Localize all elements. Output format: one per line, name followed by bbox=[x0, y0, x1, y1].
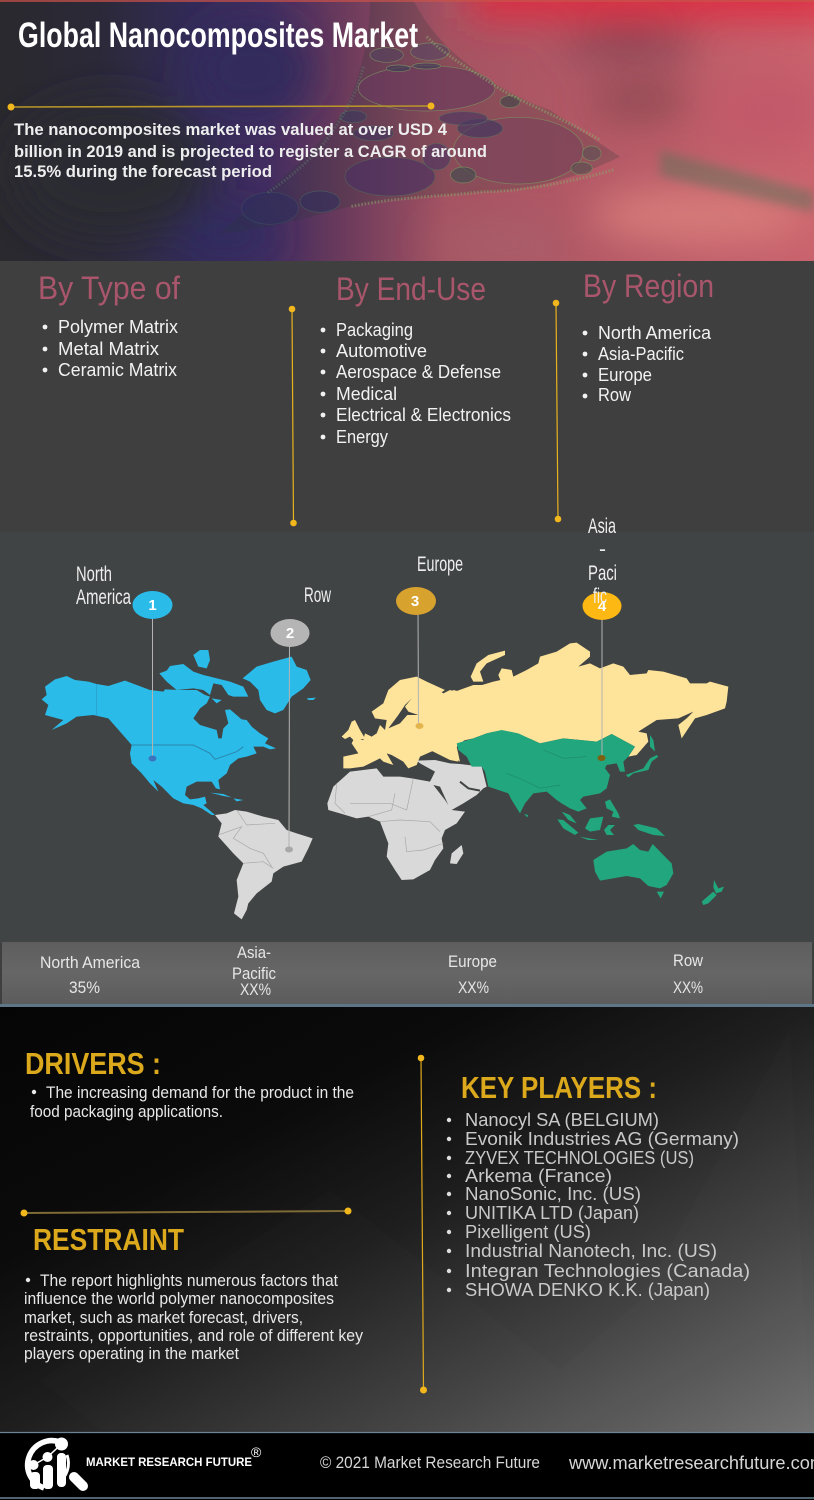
list: regions: Europe bbox=[598, 364, 652, 385]
panel: header banner bbox=[0, 0, 814, 261]
divider: type and end-use bbox=[289, 306, 297, 526]
brand name: MARKET RESEARCH FUTURE bbox=[86, 1457, 252, 1469]
drivers text bbox=[30, 1084, 354, 1121]
list: key players: UNITIKA LTD (Japan) bbox=[465, 1203, 639, 1223]
map label: asia-pacific bbox=[588, 515, 617, 608]
list: end-uses: Aerospace & Defense bbox=[336, 361, 501, 382]
pin 2: row: 2 bbox=[286, 625, 294, 642]
panel: footer bbox=[0, 1432, 814, 1500]
list: key players: NanoSonic, Inc. (US) bbox=[465, 1184, 641, 1204]
list: end-uses: Packaging bbox=[336, 319, 413, 340]
restraint text: players operating in the market bbox=[24, 1345, 239, 1363]
list: regions bbox=[583, 322, 712, 405]
list: key players: Evonik Industries AG (Germany) bbox=[465, 1129, 739, 1149]
panel: share strip bbox=[0, 942, 814, 1007]
copyright: © 2021 Market Research Future bbox=[320, 1454, 540, 1472]
heading: drivers: DRIVERS : bbox=[25, 1046, 161, 1081]
list: key players: Pixelligent (US) bbox=[465, 1222, 591, 1242]
panel: drivers, restraint and key players bbox=[0, 1007, 814, 1432]
list: types: Metal Matrix bbox=[58, 338, 160, 359]
share: asia-pacific: Pacific bbox=[232, 965, 276, 983]
pin 4: asia-pacific bbox=[582, 592, 622, 761]
list: end-uses: Medical bbox=[336, 383, 397, 404]
list: types: Polymer Matrix bbox=[58, 316, 179, 337]
drivers text: The increasing demand for the product in the bbox=[46, 1084, 354, 1102]
pin 2: row bbox=[270, 619, 310, 852]
heading: key players: KEY PLAYERS : bbox=[461, 1070, 657, 1105]
gold divider: drivers and restraint bbox=[20, 1208, 352, 1216]
pin 1: north america: 1 bbox=[148, 597, 157, 614]
pin 3: europe bbox=[396, 587, 436, 729]
heading: by type: By Type of bbox=[38, 270, 180, 306]
share: europe: XX% bbox=[458, 979, 489, 997]
map: asia-pacific bbox=[457, 730, 724, 905]
list: regions: North America bbox=[598, 322, 712, 343]
share: row: XX% bbox=[673, 979, 703, 997]
list: regions: Row bbox=[598, 384, 632, 405]
divider: end-use and region bbox=[553, 300, 561, 522]
list: key players bbox=[447, 1110, 750, 1300]
heading: by end-use: By End-Use bbox=[336, 271, 486, 307]
panel: by end-use bbox=[321, 271, 511, 447]
list: end-uses bbox=[321, 319, 511, 447]
heading: restraint: RESTRAINT bbox=[33, 1222, 184, 1257]
list: key players: Industrial Nanotech, Inc. (US) bbox=[465, 1241, 717, 1261]
panel: by type bbox=[38, 270, 180, 380]
map: north america bbox=[42, 650, 316, 815]
map label: asia-pacific: Paci bbox=[588, 562, 617, 585]
panel: by region bbox=[583, 268, 714, 405]
map label: north america: America bbox=[76, 586, 131, 609]
heading: by region: By Region bbox=[583, 268, 714, 304]
fractal tail bbox=[660, 150, 814, 212]
restraint text: restraints, opportunities, and role of different key bbox=[24, 1327, 364, 1345]
map label: asia-pacific: fic bbox=[593, 585, 607, 608]
map label: asia-pacific: Asia bbox=[588, 515, 616, 538]
intro text: 15.5% during the forecast period bbox=[14, 162, 272, 181]
list: regions: Asia-Pacific bbox=[598, 343, 684, 364]
pin 1: north america bbox=[132, 591, 172, 762]
title: Global Nanocomposites Market bbox=[18, 16, 418, 55]
share: asia-pacific: Asia- bbox=[237, 944, 271, 962]
drivers text: food packaging applications. bbox=[30, 1103, 223, 1121]
map label: row: Row bbox=[304, 584, 332, 607]
intro text: billion in 2019 and is projected to register a CAGR of around bbox=[14, 142, 487, 161]
restraint text: influence the world polymer nanocomposites bbox=[24, 1290, 334, 1308]
list: key players: SHOWA DENKO K.K. (Japan) bbox=[465, 1280, 710, 1300]
list: key players: ZYVEX TECHNOLOGIES (US) bbox=[465, 1148, 694, 1168]
share: europe bbox=[448, 953, 497, 997]
panel: world map section bbox=[0, 532, 814, 943]
divider: left and right columns bbox=[418, 1055, 427, 1394]
icon: logo magnifier bbox=[28, 1438, 83, 1489]
map label: asia-pacific: - bbox=[599, 538, 606, 561]
restraint text: market, such as market forecast, drivers, bbox=[24, 1309, 303, 1327]
restraint text: The report highlights numerous factors that bbox=[40, 1272, 338, 1290]
pin 3: europe: 3 bbox=[411, 593, 419, 610]
share: asia-pacific bbox=[232, 944, 276, 999]
list: end-uses: Electrical & Electronics bbox=[336, 404, 511, 425]
intro text bbox=[14, 120, 487, 181]
map label: north america bbox=[76, 563, 131, 609]
drivers block bbox=[25, 1046, 354, 1121]
list: end-uses: Energy bbox=[336, 426, 389, 447]
top accent bbox=[0, 0, 814, 2]
fractal web bbox=[220, 0, 620, 233]
restraint block bbox=[24, 1222, 364, 1363]
share: north america: North America bbox=[40, 954, 141, 972]
share: row: Row bbox=[673, 952, 703, 970]
panel: segmentation bbox=[0, 261, 814, 532]
intro text: The nanocomposites market was valued at over USD 4 bbox=[14, 120, 448, 139]
list: end-uses: Automotive bbox=[336, 340, 427, 361]
key players block bbox=[447, 1070, 750, 1300]
map: europe and russia bbox=[342, 643, 728, 768]
share: europe: Europe bbox=[448, 953, 497, 971]
share: north america: 35% bbox=[69, 979, 100, 997]
list: key players: Nanocyl SA (BELGIUM) bbox=[465, 1110, 659, 1130]
list: types bbox=[43, 316, 179, 380]
list: key players: Integran Technologies (Canada) bbox=[465, 1261, 750, 1281]
list: types: Ceramic Matrix bbox=[58, 359, 178, 380]
registered mark: ® bbox=[251, 1444, 262, 1460]
share: north america bbox=[40, 954, 141, 997]
restraint text bbox=[24, 1272, 364, 1363]
gold divider: header bbox=[8, 102, 434, 110]
map label: north america: North bbox=[76, 563, 112, 586]
share: row bbox=[673, 952, 703, 997]
map: south america and africa bbox=[215, 760, 487, 919]
share: asia-pacific: XX% bbox=[240, 981, 271, 999]
world map bbox=[42, 643, 728, 919]
list: key players: Arkema (France) bbox=[465, 1166, 612, 1186]
pin 4: asia-pacific: 4 bbox=[598, 598, 607, 615]
map label: europe: Europe bbox=[417, 553, 463, 576]
